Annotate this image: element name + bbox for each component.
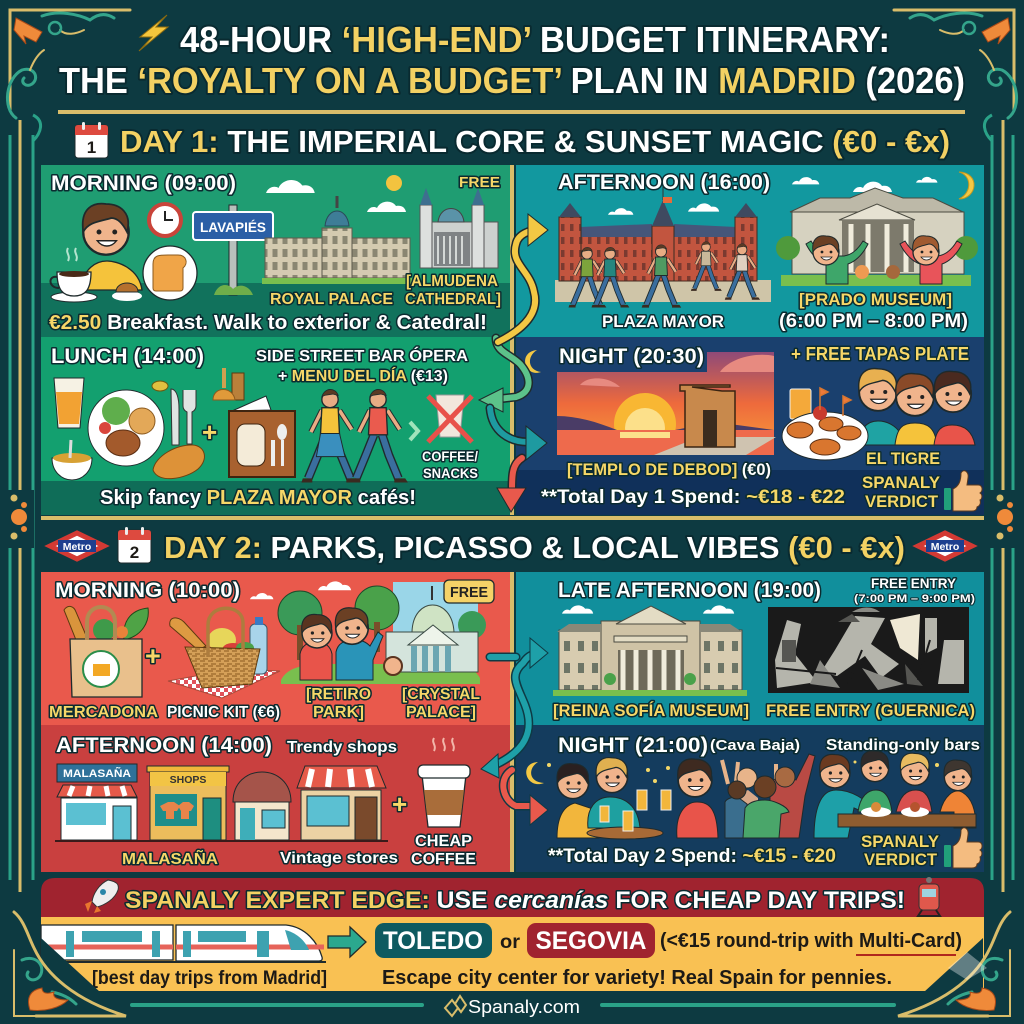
almudena label: CATHEDRAL] xyxy=(405,291,501,308)
title xyxy=(59,15,965,101)
friends at table with beers xyxy=(557,758,718,839)
night label: NIGHT (20:30) xyxy=(559,345,704,368)
panel: day 2 morning xyxy=(41,572,511,725)
plus sign: + xyxy=(145,641,161,671)
icon: friends xyxy=(858,369,975,445)
icon: tapas plate xyxy=(782,388,868,460)
almudena label: [ALMUDENA xyxy=(406,273,498,290)
chevron xyxy=(410,422,418,440)
icon: lightning xyxy=(139,15,168,51)
icon: moon xyxy=(526,762,544,784)
title: 48-HOUR ‘HIGH-END’ BUDGET ITINERARY: xyxy=(180,19,890,60)
spanaly verdict xyxy=(862,473,941,511)
icon: no coffee xyxy=(428,395,472,442)
corner ornaments: bottom xyxy=(14,912,1010,1016)
escape note: Escape city center for variety! Real Spain for pennies. xyxy=(382,967,892,989)
spanaly verdict xyxy=(861,832,940,869)
retiro label xyxy=(306,686,371,721)
crystal label xyxy=(402,686,480,721)
arrows: day 2 route xyxy=(481,638,548,825)
train caption: [best day trips from Madrid] xyxy=(92,968,327,989)
panel: day 2 afternoon xyxy=(41,725,511,872)
shop: clothes xyxy=(147,766,229,840)
guernica label: FREE ENTRY (GUERNICA) xyxy=(766,702,975,720)
total day 1: **Total Day 1 Spend: ~€18 - €22 xyxy=(541,487,845,508)
icon: clock xyxy=(149,204,181,236)
coffee snacks label: SNACKS xyxy=(423,465,478,481)
segovia pill: SEGOVIA xyxy=(536,927,646,955)
spanaly verdict: VERDICT xyxy=(865,492,939,511)
street sign: Lavapiés xyxy=(193,205,273,295)
panel: expert edge xyxy=(41,877,984,991)
divider line day 2 xyxy=(510,572,514,872)
clouds and moon xyxy=(608,172,974,215)
breakfast note: €2.50 Breakfast. Walk to exterior & Catedral! xyxy=(49,312,487,334)
icon: soup xyxy=(52,440,92,480)
crystal palace xyxy=(386,586,478,672)
plaza mayor xyxy=(555,186,771,308)
divider lines day 1 xyxy=(41,165,984,520)
bar label: SIDE STREET BAR ÓPERA xyxy=(256,346,468,365)
reina sofia museum xyxy=(553,606,747,696)
expert heading: SPANALY EXPERT EDGE: USE cercanías FOR CHEAP DAY TRIPS! xyxy=(125,887,905,914)
lunch label: LUNCH (14:00) xyxy=(51,345,204,368)
cheap coffee label: COFFEE xyxy=(411,851,476,868)
high speed train xyxy=(41,925,326,963)
morning label: MORNING (09:00) xyxy=(51,172,236,195)
icon: condiments xyxy=(213,368,244,400)
panel: day 1 lunch xyxy=(41,337,511,515)
icon: calendar 1 xyxy=(75,122,108,158)
icon: moon xyxy=(525,350,541,373)
royal palace label: ROYAL PALACE xyxy=(270,291,393,308)
cheap coffee label: CHEAP xyxy=(415,833,472,850)
icon: thumbs up xyxy=(944,471,982,511)
plus sign: + xyxy=(392,789,407,819)
night label: NIGHT (21:00) xyxy=(558,734,708,757)
icon: toast plate xyxy=(143,246,197,300)
retiro park scene xyxy=(278,582,486,684)
free entry hours: FREE ENTRY xyxy=(871,575,957,591)
prado label xyxy=(779,290,968,332)
vintage label: Vintage stores xyxy=(280,850,398,867)
morning label: MORNING (10:00) xyxy=(55,579,240,602)
free entry hours xyxy=(854,575,975,605)
toledo pill: TOLEDO xyxy=(383,927,483,955)
retiro label: [RETIRO xyxy=(306,686,371,703)
late afternoon label: LATE AFTERNOON (19:00) xyxy=(558,579,821,602)
footer: Spanaly.com xyxy=(468,997,580,1017)
skip note: Skip fancy PLAZA MAYOR cafés! xyxy=(100,487,416,509)
reina sofia label: [REINA SOFÍA MUSEUM] xyxy=(553,701,749,720)
coffee snacks label xyxy=(422,448,478,481)
icon: knife and fork xyxy=(171,389,196,445)
panel: day 2 night xyxy=(516,725,984,872)
afternoon label: AFTERNOON (16:00) xyxy=(558,171,770,194)
panel: day 2 late afternoon xyxy=(516,572,984,725)
sunset with temple of debod xyxy=(557,352,776,455)
guernica painting xyxy=(768,607,969,693)
royal palace xyxy=(262,196,412,284)
icon: traveller with coffee xyxy=(50,204,142,302)
mercadona label: MERCADONA xyxy=(49,704,158,721)
icon: calendar 2 xyxy=(118,527,151,563)
plus sign: + xyxy=(202,417,217,447)
panel: day 1 night xyxy=(516,337,984,515)
bar label xyxy=(256,346,468,385)
picnic kit label: PICNIC KIT (€6) xyxy=(167,704,280,721)
panel: day 1 morning xyxy=(41,165,511,337)
clouds xyxy=(250,581,351,599)
crystal label: PALACE] xyxy=(406,704,476,721)
street sign: Lavapiés: LAVAPIÉS xyxy=(200,219,266,235)
heading: day 2: DAY 2: PARKS, PICASSO & LOCAL VIBES (€0 - €x) xyxy=(164,530,905,565)
or: or xyxy=(500,932,521,953)
debod label: [TEMPLO DE DEBOD] (€0) xyxy=(567,460,771,479)
icon: mercadona bag xyxy=(64,606,148,697)
retiro label: PARK] xyxy=(313,704,364,721)
price note: (<€15 round-trip with Multi-Card) xyxy=(660,930,962,952)
icon: metro left xyxy=(50,533,104,559)
icon: juice xyxy=(54,378,84,428)
free badge xyxy=(444,580,494,603)
shop: small xyxy=(233,772,291,840)
free badge: FREE xyxy=(450,584,488,601)
crystal label: [CRYSTAL xyxy=(402,686,480,703)
spanaly verdict: SPANALY xyxy=(861,832,940,851)
bar label: + MENU DEL DÍA (€13) xyxy=(278,366,448,385)
standing bars label: Standing-only bars xyxy=(826,737,980,754)
afternoon label: AFTERNOON (14:00) xyxy=(56,734,272,757)
malasaña label: MALASAÑA xyxy=(122,848,218,868)
clouds xyxy=(562,605,734,614)
free entry hours: (7:00 PM – 9:00 PM) xyxy=(854,593,975,605)
cheap coffee label xyxy=(411,833,476,868)
clouds and sun xyxy=(266,175,406,212)
standing bar group xyxy=(814,751,976,838)
spanaly verdict: SPANALY xyxy=(862,473,941,492)
icon: metro right xyxy=(918,533,972,559)
icon: thumbs up xyxy=(944,828,982,868)
shop: malasaña: MALASAÑA xyxy=(63,767,131,780)
watermark diamond xyxy=(948,952,987,980)
almudena cathedral xyxy=(420,188,498,268)
icon: rocket xyxy=(85,880,118,913)
total day 2: **Total Day 2 Spend: ~€15 - €20 xyxy=(548,846,836,867)
icon: lunch plate xyxy=(88,381,168,466)
prado label: [PRADO MUSEUM] xyxy=(799,290,952,309)
icon: walking people xyxy=(301,389,408,482)
free tag: FREE xyxy=(459,174,500,191)
free tapas label: + FREE TAPAS PLATE xyxy=(791,344,969,364)
almudena label xyxy=(405,273,501,308)
prado museum xyxy=(776,188,978,286)
shop: malasaña xyxy=(57,764,137,840)
icon: calendar 1: 1 xyxy=(87,138,96,157)
coffee snacks label: COFFEE/ xyxy=(422,448,478,464)
icon: menu book xyxy=(229,396,295,477)
spanaly verdict: VERDICT xyxy=(864,850,938,869)
panel: day 1 afternoon xyxy=(516,165,984,337)
shop: clothes: SHOPS xyxy=(170,774,206,786)
icon: bread xyxy=(153,445,204,479)
prado label: (6:00 PM – 8:00 PM) xyxy=(779,311,968,332)
stars xyxy=(547,760,939,783)
shop: vintage xyxy=(55,766,388,842)
icon: spanaly logo xyxy=(445,996,466,1016)
icon: takeaway coffee xyxy=(418,738,470,827)
trendy shops label: Trendy shops xyxy=(287,739,397,756)
plaza mayor label: PLAZA MAYOR xyxy=(602,312,724,331)
icon: picnic basket xyxy=(168,608,280,698)
heading: day 1: DAY 1: THE IMPERIAL CORE & SUNSET MAGIC (€0 - €x) xyxy=(120,124,950,159)
arrows: day 1 route xyxy=(479,214,548,512)
icon: train small xyxy=(918,877,940,916)
cava baja label: (Cava Baja) xyxy=(710,737,800,754)
arrow to destinations xyxy=(328,927,366,957)
icon: family xyxy=(300,608,402,680)
el tigre label: EL TIGRE xyxy=(866,449,940,468)
title: THE ‘ROYALTY ON A BUDGET’ PLAN IN MADRID (2026) xyxy=(59,60,965,101)
footer xyxy=(130,996,896,1017)
icon: calendar 2: 2 xyxy=(130,543,139,562)
cheering crowd xyxy=(722,754,815,838)
